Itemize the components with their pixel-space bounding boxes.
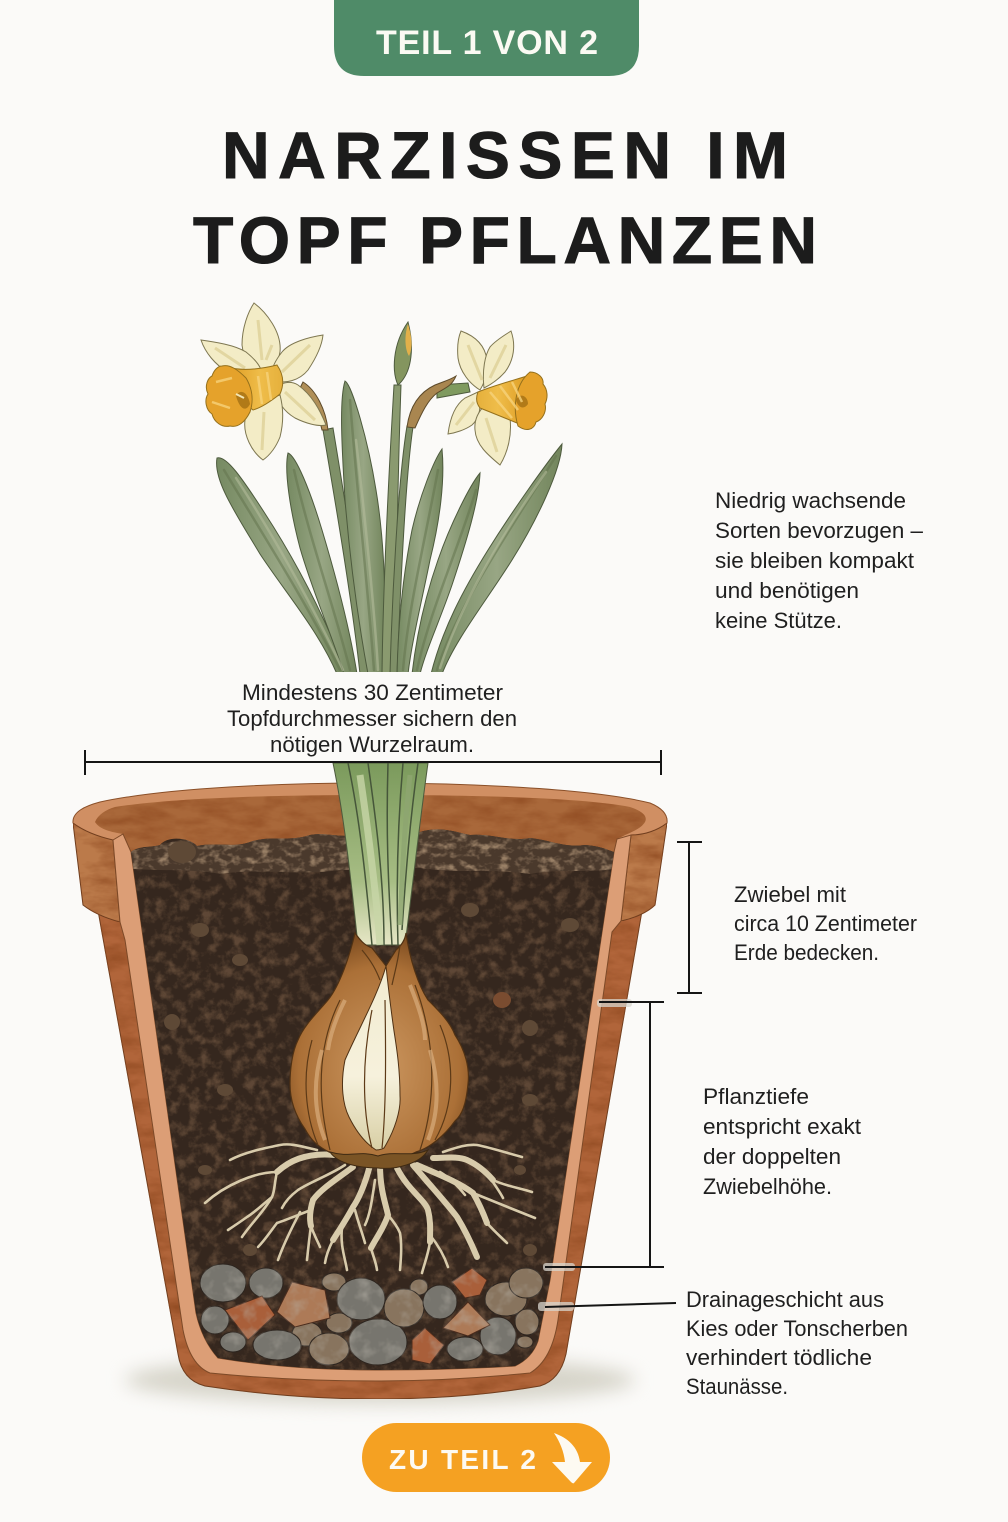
pot cut face	[113, 834, 631, 1381]
label: low varieties: und benötigen	[715, 578, 859, 603]
leaf far left	[217, 458, 347, 674]
bud	[394, 322, 412, 385]
label: low varieties	[715, 488, 924, 633]
leaf left	[287, 453, 357, 674]
right flower petals	[448, 331, 514, 465]
label: soil cover	[734, 882, 917, 965]
label: planting depth: entspricht exakt	[703, 1114, 861, 1139]
pot rim band right	[621, 823, 667, 921]
label: drainage: Drainageschicht aus	[686, 1287, 884, 1312]
leaf ribs	[224, 400, 556, 670]
label: soil cover: circa 10 Zentimeter	[734, 911, 917, 936]
right flower trumpet	[477, 375, 530, 423]
label: low varieties: sie bleiben kompakt	[715, 548, 914, 573]
soil clumps	[164, 841, 579, 1256]
label: low varieties: Niedrig wachsende	[715, 488, 906, 513]
label: pot diameter: Mindestens 30 Zentimeter	[242, 680, 503, 705]
illustration: daffodil plant above the pot	[201, 303, 562, 674]
label: drainage: Kies oder Tonscherben	[686, 1316, 908, 1341]
bulb outer scales	[290, 933, 468, 1158]
label: planting depth: der doppelten	[703, 1144, 841, 1169]
leaf right	[412, 473, 480, 674]
leader marker pills	[538, 999, 632, 1311]
label: soil cover: Zwiebel mit	[734, 882, 846, 907]
icon: curved down arrow	[552, 1433, 592, 1483]
title: TOPF PFLANZEN	[193, 203, 817, 277]
illustration: green shoots between bulb and rim	[333, 763, 428, 945]
ground shadow	[125, 1356, 635, 1404]
left flower trumpet	[227, 365, 283, 410]
label: planting depth: Pflanztiefe	[703, 1084, 809, 1109]
label: low varieties: Sorten bevorzugen –	[715, 518, 924, 543]
label: drainage: Staunässe.	[686, 1374, 788, 1399]
leaf centre right	[397, 449, 443, 674]
leader: drainage	[545, 1303, 676, 1307]
label: pot diameter	[227, 680, 517, 757]
label: low varieties: keine Stütze.	[715, 608, 842, 633]
white panel behind diameter label	[200, 672, 540, 762]
left flower petals	[201, 303, 326, 460]
pot body outer	[97, 905, 643, 1399]
right flower stem	[390, 426, 413, 674]
label: drainage	[686, 1287, 908, 1399]
pot rim lip	[73, 783, 667, 860]
central tall leaf	[342, 381, 385, 674]
button: Zu Teil 2	[362, 1423, 610, 1492]
label: pot diameter: Topfdurchmesser sichern den	[227, 706, 517, 731]
illustration: terracotta pot with soil, bulb, roots and drainage	[73, 783, 667, 1399]
soil	[120, 825, 630, 1375]
illustration: onion bulb	[290, 933, 468, 1168]
bracket: soil cover	[677, 842, 702, 993]
dimension line: pot diameter	[85, 750, 661, 775]
bulb scale lines	[306, 945, 451, 1150]
label: pot diameter: nötigen Wurzelraum.	[270, 732, 474, 757]
title: NARZISSEN IM	[222, 118, 788, 192]
header tab: Teil 1 von 2: TEIL 1 VON 2	[376, 24, 598, 62]
label: soil cover: Erde bedecken.	[734, 940, 879, 965]
pot back wall	[95, 795, 646, 860]
leaf far right	[431, 444, 562, 674]
left flower stem	[323, 428, 371, 674]
bud stem	[382, 385, 401, 674]
soil top crust	[125, 826, 620, 874]
title	[193, 118, 817, 277]
label: planting depth	[703, 1084, 861, 1199]
bulb basal plate	[330, 1150, 428, 1168]
header tab: Teil 1 von 2	[334, 0, 639, 76]
right flower neck and sheath	[437, 383, 470, 398]
button: Zu Teil 2: ZU TEIL 2	[389, 1444, 536, 1475]
bracket: planting depth	[545, 1002, 664, 1267]
left flower sheath	[300, 382, 328, 430]
illustration: roots	[205, 1144, 535, 1273]
right flower ruffled cup	[515, 372, 547, 429]
label: planting depth: Zwiebelhöhe.	[703, 1174, 832, 1199]
illustration: drainage stones	[200, 1264, 543, 1365]
right flower	[407, 331, 547, 465]
bulb white core	[342, 966, 400, 1150]
left flower ruffled cup	[206, 366, 252, 426]
left flower	[201, 303, 328, 460]
pot rim band left	[73, 823, 120, 922]
label: drainage: verhindert tödliche	[686, 1345, 872, 1370]
